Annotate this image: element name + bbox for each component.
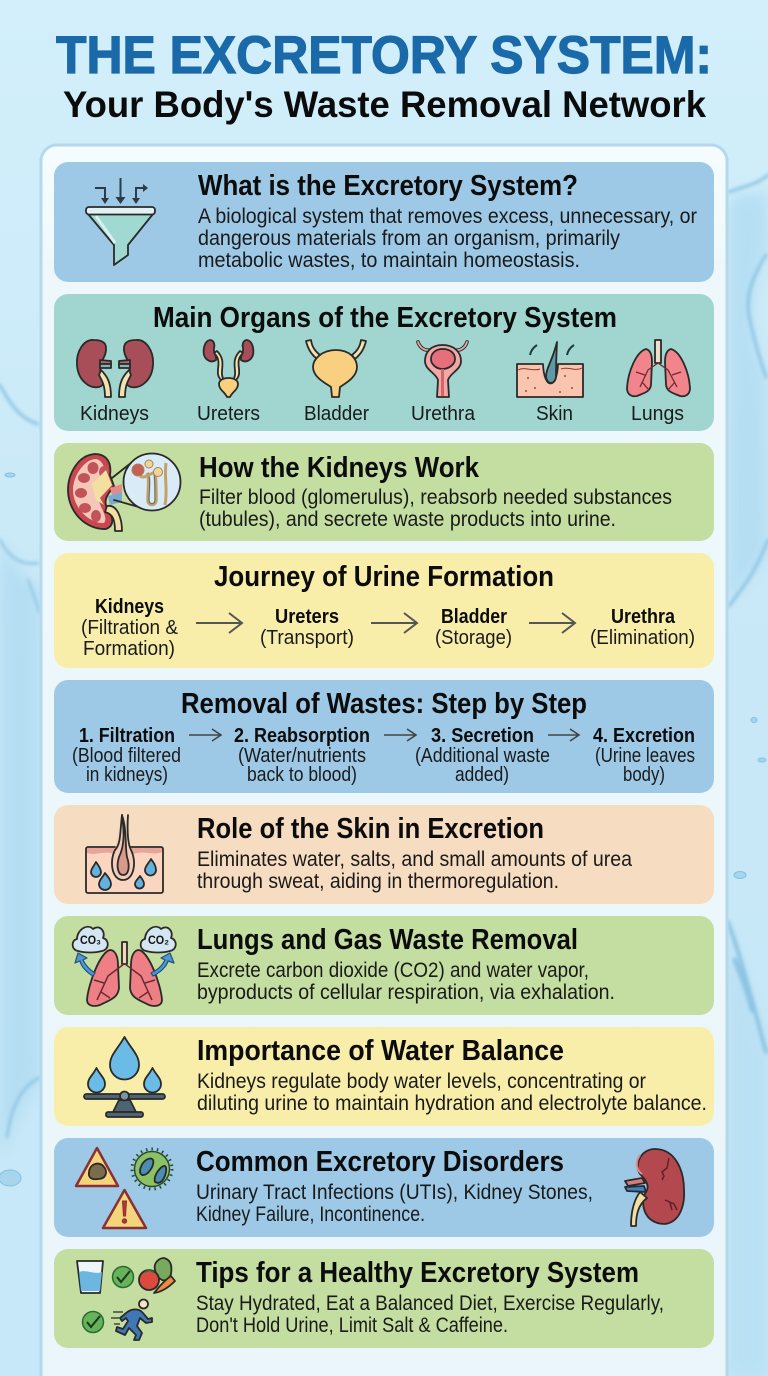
icon: bladder (306, 340, 366, 397)
icon: water drops on balance (84, 1037, 165, 1117)
icon: check mark (82, 1312, 104, 1332)
text block (197, 959, 615, 1004)
organ labels: Kidneys (80, 402, 149, 425)
organ labels (80, 402, 684, 425)
icon: water glass (77, 1261, 103, 1293)
icon: ureters (204, 340, 253, 397)
organ labels: Urethra (411, 402, 476, 425)
heading: Lungs and Gas Waste Removal (197, 924, 578, 956)
panel: main organs (54, 294, 714, 431)
step: bladder: (Storage) (435, 626, 512, 649)
panel: role of the skin (54, 805, 714, 904)
icon: lungs with CO2 clouds: CO₃ (80, 933, 101, 947)
step 4 (593, 724, 695, 786)
step 4: body) (623, 763, 665, 786)
panel: tips (54, 1249, 714, 1348)
step 4: (Urine leaves (595, 744, 695, 767)
icon: damaged kidney (625, 1149, 684, 1226)
step: kidneys: Kidneys (95, 595, 164, 618)
text block (197, 848, 632, 893)
text block: Filter blood (glomerulus), reabsorb needed substances (199, 486, 672, 509)
heading: Tips for a Healthy Excretory System (196, 1257, 639, 1289)
icon: bacteria (132, 1149, 172, 1189)
text block: Excrete carbon dioxide (CO2) and water vapor, (197, 959, 589, 982)
text block: dangerous materials from an organism, primarily (198, 227, 620, 250)
panel: removal of wastes (54, 680, 714, 793)
heading: Main Organs of the Excretory System (153, 302, 617, 334)
icon: kidneys (77, 340, 153, 397)
heading: Common Excretory Disorders (196, 1146, 564, 1178)
step 3: 3. Secretion (431, 724, 534, 747)
text block: byproducts of cellular respiration, via exhalation. (197, 981, 615, 1004)
step: kidneys: (Filtration & (81, 616, 178, 639)
organ labels: Lungs (631, 402, 684, 425)
icon: warning triangle (103, 1190, 146, 1228)
step 2: 2. Reabsorption (234, 724, 370, 747)
icon: urethra (418, 342, 467, 397)
icon: lungs with CO2 clouds: CO₂ (148, 933, 169, 947)
text block (197, 1070, 707, 1115)
text block (198, 205, 697, 272)
text block: through sweat, aiding in thermoregulation. (197, 870, 559, 893)
organ labels: Ureters (197, 402, 260, 425)
text block: A biological system that removes excess, unnecessary, or (198, 205, 697, 228)
step: ureters: Ureters (275, 605, 339, 628)
icon: runner (111, 1300, 152, 1340)
panel: common disorders (54, 1138, 714, 1237)
icon: skin with sweat drops (86, 815, 163, 893)
step 1 (72, 724, 181, 786)
panel: lungs and gas waste (54, 916, 714, 1015)
step 2: (Water/nutrients (238, 744, 366, 767)
panel: what is the excretory system (54, 162, 714, 282)
step: bladder (435, 605, 512, 649)
step: bladder: Bladder (441, 605, 507, 628)
arrow (196, 613, 242, 633)
arrow (371, 613, 417, 633)
heading: What is the Excretory System? (198, 170, 578, 202)
step 1: in kidneys) (86, 763, 168, 786)
text block: Don't Hold Urine, Limit Salt & Caffeine. (196, 1314, 508, 1337)
step: ureters (260, 605, 354, 649)
arrow (189, 729, 221, 741)
text block: Urinary Tract Infections (UTIs), Kidney Stones, (196, 1181, 593, 1204)
title: THE EXCRETORY SYSTEM: (56, 26, 712, 85)
icon: kidney stone warning (76, 1148, 118, 1186)
step: urethra: Urethra (611, 605, 676, 628)
heading: Importance of Water Balance (197, 1035, 564, 1067)
step: kidneys (81, 595, 178, 660)
step 3: added) (455, 763, 509, 786)
text block: Kidney Failure, Incontinence. (196, 1203, 425, 1226)
step: urethra: (Elimination) (590, 626, 695, 649)
organ labels: Skin (536, 402, 573, 425)
text block (196, 1181, 593, 1226)
heading: Removal of Wastes: Step by Step (181, 688, 587, 720)
step 1: (Blood filtered (72, 744, 181, 767)
icon: kidney with nephron detail (68, 454, 180, 531)
icon: lungs (627, 340, 690, 396)
heading: How the Kidneys Work (199, 452, 480, 484)
step 2: back to blood) (247, 763, 357, 786)
step 1: 1. Filtration (79, 724, 175, 747)
text block: Eliminates water, salts, and small amounts of urea (197, 848, 632, 871)
step: urethra (590, 605, 695, 649)
step 2 (234, 724, 370, 786)
panel: journey of urine formation (54, 553, 714, 668)
panel: how the kidneys work (54, 443, 714, 541)
title: Your Body's Waste Removal Network (63, 84, 706, 125)
text block: Stay Hydrated, Eat a Balanced Diet, Exercise Regularly, (196, 1292, 664, 1315)
step: kidneys: Formation) (83, 637, 175, 660)
arrow (529, 613, 575, 633)
step 4: 4. Excretion (593, 724, 695, 747)
heading: Journey of Urine Formation (214, 561, 554, 593)
main container (41, 145, 727, 1376)
arrow (548, 729, 579, 741)
heading: Role of the Skin in Excretion (197, 813, 544, 845)
title (56, 26, 712, 125)
text block: Kidneys regulate body water levels, concentrating or (197, 1070, 646, 1093)
step 3: (Additional waste (415, 744, 550, 767)
text block (199, 486, 672, 531)
step 3 (415, 724, 550, 786)
icon: check mark (112, 1266, 134, 1288)
icon: vegetables (139, 1258, 175, 1293)
organ labels: Bladder (304, 402, 369, 425)
text block: metabolic wastes, to maintain homeostasis. (198, 249, 580, 272)
step: ureters: (Transport) (260, 626, 354, 649)
text block: diluting urine to maintain hydration and electrolyte balance. (197, 1092, 707, 1115)
icon: skin (517, 342, 583, 397)
panel: water balance (54, 1027, 714, 1126)
text block: (tubules), and secrete waste products into urine. (199, 508, 616, 531)
icon: lungs with CO2 clouds (73, 927, 176, 1006)
icon: funnel (86, 178, 155, 265)
text block (196, 1292, 664, 1337)
arrow (384, 729, 416, 741)
